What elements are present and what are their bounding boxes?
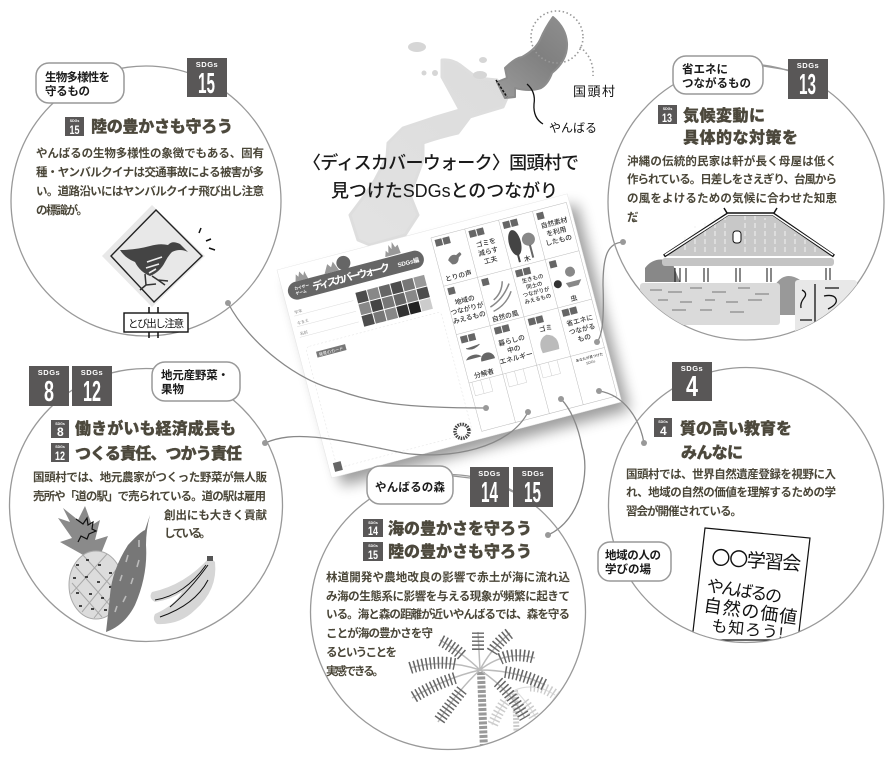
- panel: SDG 4 education: [598, 362, 884, 643]
- body text: 創出にも大きく貢献: [164, 508, 268, 522]
- cell: energy: エネルギー: [499, 350, 534, 366]
- body text: 作られている。日差しをさえぎり、台風から: [627, 172, 837, 186]
- body text: だ。: [627, 211, 643, 224]
- worksheet header: ゲーム: [295, 288, 307, 296]
- body text: い。道路沿いにはヤンバルクイナ飛び出し注意: [36, 184, 264, 198]
- cell: creatures: 生きもの: [521, 272, 545, 285]
- cell: waste reduction: 工夫: [483, 254, 498, 266]
- panel: SDG 8 and 12: [10, 362, 282, 642]
- heading: 具体的な対策を: [683, 128, 798, 147]
- worksheet form lines: [292, 294, 359, 337]
- heading: 13: [662, 111, 672, 125]
- body text: の標識が。: [36, 203, 88, 217]
- map: Kunigami dotted circle and label: 国頭村: [573, 84, 615, 99]
- label: local vegetables: 地元産野菜・: [161, 368, 229, 382]
- body text: している。: [164, 527, 211, 540]
- illustration: traditional house: [640, 208, 857, 335]
- heading: 陸の豊かさも守ろう: [91, 117, 233, 136]
- worksheet form lines: なまえ: [296, 317, 309, 326]
- worksheet discovery card area: [306, 312, 473, 468]
- body text: ことが海の豊かさを守: [326, 626, 433, 640]
- map: Yanbaru boundary and label: やんばる: [549, 121, 597, 135]
- body text: の風をよけるための気候に合わせた知恵: [627, 191, 838, 205]
- SDGs badge 15: 15: [198, 68, 215, 100]
- worksheet discovery card area: 発見のカード: [318, 345, 344, 358]
- cell: your SDGs: あなたが見つけた: [575, 351, 604, 363]
- map: Yanbaru northern area: [497, 17, 567, 98]
- heading: 4: [660, 424, 667, 438]
- SDGs badge 13: 13: [799, 69, 816, 101]
- cell: insects: 虫: [569, 293, 578, 303]
- panel: SDG 15 life on land: [11, 58, 281, 338]
- illustration: study session poster: 〇〇学習会: [711, 547, 802, 575]
- heading: 海の豊かさを守ろう: [388, 519, 532, 538]
- heading: 12: [55, 449, 65, 463]
- heading: みんなに: [681, 444, 743, 462]
- label: local vegetables: 果物: [161, 382, 184, 396]
- icon: palm trees: [410, 632, 558, 750]
- SDGs badge 14: SDGs: [478, 469, 501, 478]
- map: Yanbaru boundary and label: [496, 80, 597, 135]
- body text: 実感できる。: [326, 664, 384, 678]
- body text: 種・ヤンバルクイナは交通事故による被害が多: [36, 165, 264, 179]
- cell: creatures: 同士の: [525, 279, 544, 291]
- heading: 質の高い教育を: [680, 419, 792, 438]
- icon: rail warning sign: とび出し注意: [128, 317, 184, 330]
- SDGs badge 12: [72, 366, 112, 408]
- icon: rail warning sign: [102, 205, 215, 338]
- label: Yanbaru forest: [367, 466, 453, 504]
- SDGs badge 8: SDGs: [38, 368, 60, 377]
- heading: 15: [368, 548, 378, 562]
- cell: natural materials: したもの: [545, 233, 573, 248]
- page shadow: [287, 204, 630, 486]
- body text: 売所や「道の駅」で売られている。道の駅は雇用: [33, 489, 266, 503]
- label: energy saving: つながるもの: [682, 76, 751, 90]
- map: Kunigami dotted circle and label: [531, 11, 615, 99]
- SDGs badge 12: SDGs: [81, 368, 103, 377]
- heading: 15: [70, 123, 80, 137]
- worksheet form lines: 名前: [299, 328, 308, 336]
- cell: natural materials: 自然素材: [540, 215, 569, 230]
- SDGs badge 4: 4: [686, 371, 698, 403]
- heading: SDGs: [55, 422, 65, 426]
- title: 見つけたSDGsとのつながり: [331, 180, 558, 201]
- cell: creatures: みえるもの: [524, 292, 553, 306]
- heading: [654, 418, 792, 462]
- body text: み海の生態系に影響を与える現象が頻繁に起きて: [326, 589, 570, 603]
- illustration: study session poster: も知ろう!: [711, 617, 784, 643]
- body text: るということを: [326, 646, 397, 659]
- cell: waste reduction: ゴミを: [475, 236, 497, 250]
- label: local learning place: 地域の人の: [605, 548, 661, 562]
- heading: 14: [368, 524, 378, 538]
- body text: 国頭村では、地元農家がつくった野菜が無人販: [33, 470, 268, 484]
- cell: natural materials: を利用: [545, 224, 568, 238]
- illustration: study session poster: 自然の価値: [702, 595, 798, 628]
- cell: energy saving: [565, 312, 599, 346]
- panel: SDG 13 climate: [608, 56, 884, 340]
- worksheet SDG icon grid: [355, 275, 433, 327]
- panel: SDG 14 and 15: [310, 466, 586, 750]
- worksheet SDG wheel logo: [453, 423, 471, 440]
- body text: [36, 146, 264, 217]
- SDGs badge 14: 14: [481, 477, 498, 509]
- label: biodiversity: [36, 63, 124, 103]
- connector lines: [228, 242, 644, 535]
- worksheet header: [282, 235, 426, 302]
- cell: garbage: [535, 322, 560, 353]
- label: energy saving: 省エネに: [682, 62, 728, 76]
- label: biodiversity: 守るもの: [45, 84, 90, 98]
- worksheet grid: [431, 202, 617, 431]
- body text: [626, 467, 836, 518]
- cell: birds: [440, 250, 473, 283]
- cell: garbage: ゴミ: [538, 322, 553, 334]
- body text: 習会が開催されている。: [626, 504, 742, 518]
- heading: SDGs: [70, 119, 79, 123]
- cell: wind: 自然の風: [491, 308, 520, 324]
- heading: [658, 105, 798, 147]
- heading: SDGs: [368, 544, 378, 548]
- cell: decomposers: 分解者: [473, 366, 495, 380]
- body text: やんばるの生物多様性の象徴でもある、固有: [36, 146, 264, 160]
- cell: community: 地域の: [454, 293, 476, 307]
- body text: [326, 570, 570, 678]
- cell: energy saving: つながる: [568, 321, 596, 337]
- cell: community: [447, 291, 487, 326]
- body text: [33, 470, 268, 540]
- cell: creatures: つながりが: [522, 284, 551, 299]
- worksheet header: ディスカバーウォーク: [311, 260, 392, 293]
- body text: [627, 154, 838, 224]
- SDGs badge 4: [672, 362, 712, 403]
- heading: SDGs: [663, 107, 672, 111]
- worksheet: [277, 194, 622, 478]
- SDGs badge 8: [29, 366, 69, 408]
- cell: your SDGs: SDGs: [586, 359, 596, 366]
- map: Okinawa island: [350, 17, 567, 245]
- SDGs badge 8: 8: [44, 376, 54, 408]
- cell: creatures: [518, 271, 553, 306]
- icon: bananas: [151, 556, 215, 624]
- connector between label and badge: [763, 66, 788, 70]
- SDGs badge 4: SDGs: [681, 364, 703, 373]
- icon: bitter gourd: [106, 515, 150, 632]
- cell: trees: 木: [523, 253, 532, 264]
- body text: 沖縄の伝統的民家は軒が長く母屋は低く: [627, 154, 837, 168]
- cell: wind: [483, 279, 520, 324]
- connector between badge and label: [453, 476, 513, 492]
- worksheet header: カイザー: [294, 282, 310, 291]
- cell: energy: 中の: [506, 343, 522, 355]
- SDGs badge 15: [513, 467, 553, 509]
- SDGs badge 15: SDGs: [522, 469, 544, 478]
- label: Yanbaru forest: やんばるの森: [375, 480, 446, 494]
- connector dots: [225, 239, 647, 538]
- heading: 働きがいも経済成長も: [75, 419, 236, 438]
- body text: れ、地域の自然の価値を理解するための学: [626, 485, 836, 499]
- cell: community: みえるもの: [452, 310, 487, 326]
- cell icons: [435, 210, 578, 344]
- title: [303, 152, 579, 201]
- SDGs badge 15: 15: [524, 477, 541, 509]
- cell: energy: 暮らしの: [497, 332, 526, 348]
- cell: natural materials: [540, 215, 573, 248]
- cell: trees: [506, 225, 541, 267]
- heading: つくる責任、つかう責任: [75, 445, 242, 463]
- cell: community: つながりが: [449, 300, 485, 317]
- label: local learning place: [598, 542, 671, 581]
- SDGs badge 13: [788, 59, 828, 101]
- cell: waste reduction: [475, 236, 502, 267]
- icon: pineapple: [58, 506, 123, 619]
- body text: 林道開発や農地改良の影響で赤土が海に流れ込: [326, 570, 570, 584]
- worksheet QR logo: [333, 461, 343, 472]
- heading: [363, 519, 532, 562]
- label: local learning place: 学びの場: [605, 562, 652, 576]
- worksheet header: SDGs編: [397, 256, 420, 269]
- heading: [51, 419, 242, 463]
- SDGs badge 14: [470, 467, 509, 509]
- cell: insects: [550, 265, 587, 307]
- SDGs badge 13: SDGs: [797, 61, 819, 70]
- label: energy saving: [673, 56, 763, 94]
- SDGs badge 15: [187, 58, 227, 100]
- label: biodiversity: 生物多様性を: [45, 70, 110, 84]
- SDGs badge 12: 12: [83, 376, 101, 408]
- cell: energy saving: もの: [577, 333, 592, 344]
- heading: 気候変動に: [683, 106, 765, 125]
- SDGs badge 15: SDGs: [196, 60, 218, 69]
- heading: SDGs: [368, 521, 378, 525]
- cell: decomposers: [464, 341, 499, 381]
- worksheet form lines: 学年: [293, 307, 303, 315]
- illustration: study session poster: [692, 528, 810, 643]
- cell: energy: [494, 332, 534, 366]
- title: 〈ディスカバーウォーク〉国頭村で: [303, 152, 579, 173]
- cell: waste reduction: 減らす: [477, 244, 499, 258]
- cell: birds: とりの声: [444, 268, 473, 283]
- body text: 国頭村では、世界自然遺産登録を視野に入: [626, 467, 836, 481]
- heading: 8: [57, 425, 64, 439]
- heading: SDGs: [55, 445, 65, 449]
- illustration: study session poster: やんばるの: [705, 576, 783, 607]
- heading: SDGs: [658, 420, 668, 424]
- label: local vegetables: [152, 362, 240, 401]
- cell: energy saving: 省エネに: [565, 312, 594, 328]
- cell: your SDGs: [575, 351, 605, 368]
- heading: 陸の豊かさも守ろう: [388, 542, 532, 561]
- body text: いる。海と森の距離が近いやんばるでは、森を守る: [326, 607, 570, 621]
